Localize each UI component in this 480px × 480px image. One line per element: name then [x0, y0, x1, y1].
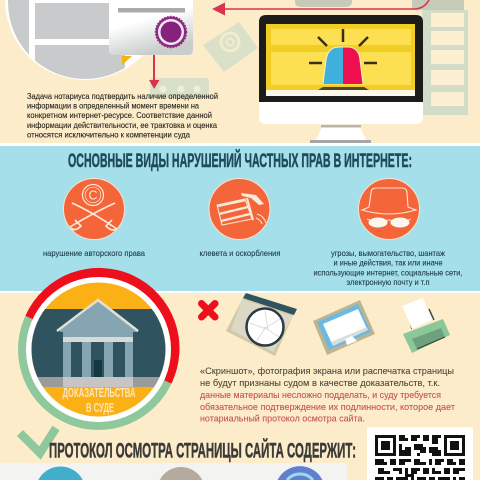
bottom panel	[0, 463, 347, 480]
screenshot explanation text: «Скриншот», фотография экрана или распечатка страницы	[200, 366, 454, 376]
badge caption	[62, 385, 136, 415]
screenshot explanation text: обязательное подтверждение их подлинности, которое дает	[200, 402, 456, 412]
notary description text: конкретном интернет-ресурсе. Соответствие данной	[27, 111, 212, 120]
icon: trash bin with papers	[209, 178, 270, 240]
notary description text: Задача нотариуса подтвердить наличие определенной	[27, 92, 218, 101]
notary description text: информации действительности, ее трактовка и оценка	[27, 121, 218, 130]
icon: copyright and swords: C	[88, 188, 98, 202]
circular site map illustration	[5, 0, 143, 80]
court evidence badge	[18, 268, 180, 430]
monitor stand	[310, 125, 371, 144]
certificate seal	[156, 16, 186, 48]
screenshot explanation text: нотариальный протокол осмотра сайта.	[200, 414, 365, 424]
icon: printer	[402, 298, 450, 353]
label: copyright: нарушение авторского права	[43, 249, 146, 258]
badge caption: ДОКАЗАТЕЛЬСТВА	[62, 385, 136, 400]
notary description text	[27, 92, 218, 140]
notary description text: информации в определенный момент времени на	[27, 102, 200, 110]
arrow left with rounded line	[212, 0, 429, 16]
screenshot explanation text: не будут признаны судом в качестве доказательств, т.к.	[200, 378, 440, 388]
icon: computer monitor	[313, 300, 375, 355]
badge caption: В СУДЕ	[86, 400, 114, 415]
icon: blue circle	[38, 466, 83, 480]
label: threats: и иные действия, так или иначе	[334, 258, 443, 268]
icon: copyright and swords	[64, 178, 124, 240]
label: threats: использующие интернет, социальные сети,	[314, 268, 462, 278]
label: slander: клевета и оскорбления	[200, 249, 280, 258]
faded email icon	[203, 22, 258, 72]
icon: red cross	[202, 304, 215, 317]
QR code	[367, 427, 473, 480]
label: threats: угрозы, вымогательство, шантаж	[331, 249, 446, 258]
icon: green check mark	[20, 428, 56, 453]
screenshot explanation text	[200, 366, 456, 424]
arrow down from card	[149, 55, 160, 89]
icon: taupe circle	[160, 467, 202, 480]
icon: camera screenshot window	[226, 293, 297, 356]
notary description text: относятся исключительно к компетенции суда	[27, 130, 191, 140]
faded browser bar	[150, 78, 209, 98]
notary certificate card	[109, 0, 193, 55]
monitor with alarm siren	[259, 15, 423, 144]
icon: hat and glasses	[358, 178, 420, 240]
label: threats: электронную почту и т.п	[346, 278, 430, 287]
icon: violet circle	[278, 466, 322, 480]
cyan section background	[0, 143, 480, 293]
siren	[309, 29, 377, 90]
courthouse building	[57, 300, 138, 387]
label: threats	[314, 249, 462, 287]
faded decorative table	[295, 0, 468, 115]
screenshot explanation text: данные материалы несложно подделать, и суду требуется	[200, 390, 441, 400]
